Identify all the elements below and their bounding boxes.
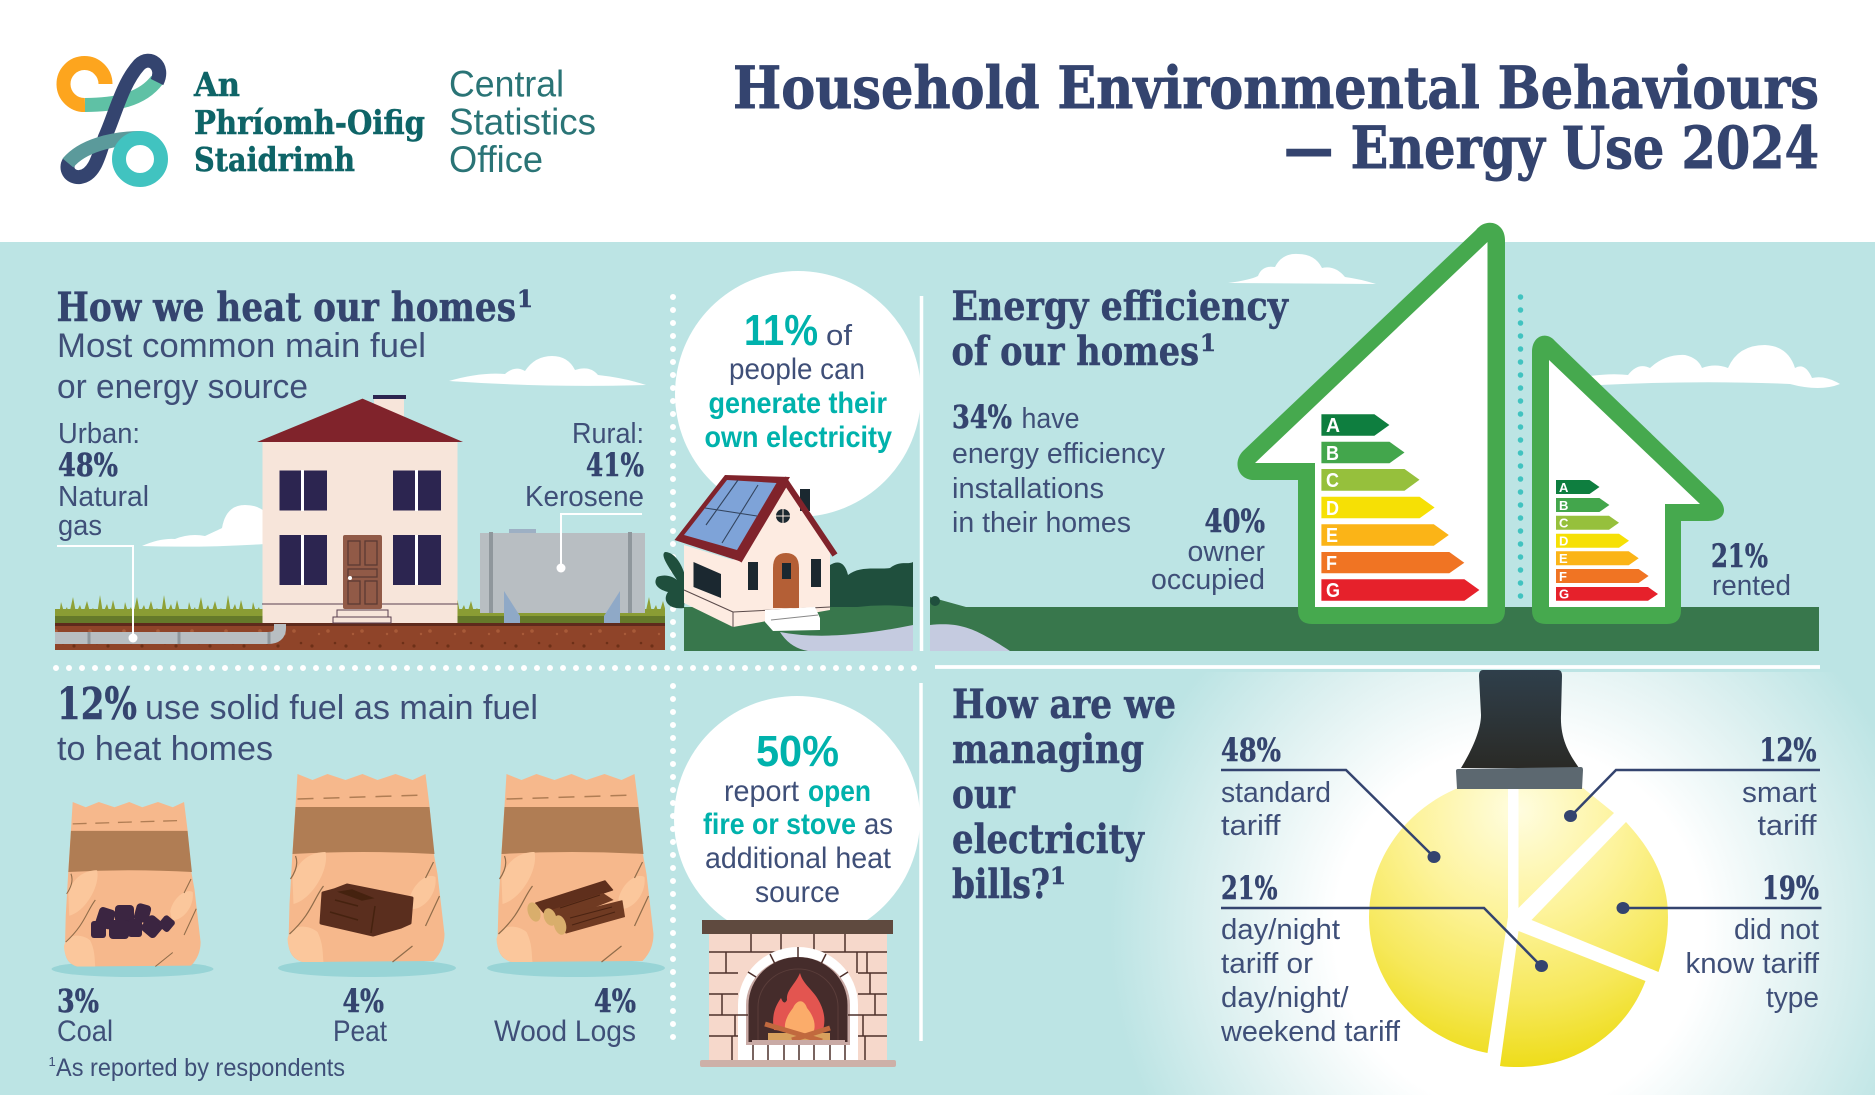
kerosene tank bbox=[480, 529, 645, 623]
energy rating scale large: C bbox=[1326, 470, 1339, 492]
logo text: English name: Central bbox=[449, 64, 564, 104]
slice: did not know 19% bbox=[1532, 822, 1668, 972]
text: 40% owner occupied: 40% bbox=[1204, 502, 1265, 540]
icon: coal bag bbox=[52, 802, 214, 977]
small house outline bbox=[1532, 336, 1724, 624]
label: 21% day/night tariff: day/night/ bbox=[1221, 982, 1349, 1014]
callout: 50% open fire: as bbox=[864, 808, 893, 841]
logo text: English name bbox=[449, 64, 596, 180]
callout: 11% generate electricity bbox=[704, 306, 892, 454]
energy rating scale large: A bbox=[1326, 415, 1340, 437]
energy rating scale small: F bbox=[1559, 569, 1567, 584]
heading: how are we managing our electricity bills bbox=[952, 681, 1176, 908]
label: coal: Coal bbox=[57, 1015, 113, 1048]
white line restore bbox=[935, 665, 1820, 669]
callout: 50% open fire: fire or stove bbox=[703, 808, 856, 841]
logo text: English name: Statistics bbox=[449, 102, 596, 142]
cloud behind house bbox=[142, 505, 265, 547]
energy rating scale small: G bbox=[1559, 586, 1569, 602]
slice: smart tariff 12% bbox=[1518, 788, 1614, 908]
rural text: Rural: bbox=[572, 418, 644, 450]
leader: 48% bbox=[1221, 770, 1440, 863]
label: 19% did not know: type bbox=[1766, 982, 1819, 1014]
label: 12% smart tariff: tariff bbox=[1758, 810, 1817, 842]
urban text bbox=[58, 418, 149, 542]
heading: how are we managing our electricity bills: How are we bbox=[952, 681, 1176, 728]
icon: CSO knot symbol bbox=[64, 61, 161, 180]
rural text: Kerosene bbox=[525, 481, 644, 513]
title bbox=[733, 54, 1819, 182]
text: 40% owner occupied: owner bbox=[1188, 536, 1265, 568]
heading: energy efficiency: Energy efficiency bbox=[952, 283, 1290, 330]
energy rating scale small: C bbox=[1559, 516, 1569, 530]
label: 48% standard tariff: 48% bbox=[1221, 731, 1281, 769]
footnote: 1 bbox=[48, 1054, 56, 1069]
page background band bbox=[0, 242, 1875, 1095]
label: wood logs: 4% bbox=[594, 982, 636, 1020]
label: 19% did not know bbox=[1686, 869, 1820, 1014]
house illustration bbox=[257, 395, 463, 623]
label: wood logs: Wood Logs bbox=[494, 1015, 636, 1048]
text: 34% installations: in their homes bbox=[952, 507, 1131, 539]
heading: 12% solid fuel: use solid fuel as main fuel bbox=[145, 689, 538, 727]
slice: standard tariff 48% bbox=[1369, 788, 1508, 1053]
icon: peat bag bbox=[278, 774, 456, 977]
background glow bbox=[1000, 672, 1875, 1095]
logo text: Irish name: Staidrimh bbox=[194, 140, 355, 179]
label: 19% did not know: 19% bbox=[1762, 869, 1819, 907]
callout: 50% open fire: 50% bbox=[756, 727, 839, 776]
panel: solid fuel bbox=[48, 679, 665, 1082]
label: wood logs bbox=[494, 982, 636, 1048]
panel: how we heat our homes bbox=[55, 284, 665, 650]
text: 40% owner occupied bbox=[1151, 502, 1265, 596]
leader: 19% bbox=[1616, 902, 1822, 914]
header: CSO logo bbox=[64, 61, 596, 180]
label: 12% smart tariff: smart bbox=[1742, 777, 1816, 809]
lamp cap bbox=[1456, 670, 1583, 789]
white circle bbox=[674, 696, 920, 942]
energy rating scale large: G bbox=[1326, 580, 1340, 602]
text: 34% installations: 34% bbox=[952, 398, 1012, 436]
text: 21% rented: 21% bbox=[1711, 537, 1768, 575]
callout: 11% generate electricity: 11% bbox=[744, 306, 818, 355]
label: 48% standard tariff bbox=[1221, 731, 1331, 842]
heading: how we heat our homes: 1 bbox=[517, 286, 533, 313]
heading: energy efficiency bbox=[952, 283, 1290, 375]
label: 21% day/night tariff bbox=[1220, 869, 1401, 1048]
soil bbox=[55, 623, 665, 650]
callout: 11% generate electricity: people can bbox=[729, 353, 865, 386]
label: 12% smart tariff bbox=[1742, 731, 1817, 842]
leader: kerosene bbox=[556, 514, 642, 572]
white circle bbox=[675, 271, 921, 517]
subheading: most common fuel: or energy source bbox=[57, 368, 308, 406]
leader: 21% bbox=[1221, 908, 1548, 972]
label: coal: 3% bbox=[57, 982, 99, 1020]
panel: energy efficiency of our homes bbox=[930, 223, 1840, 651]
panel: managing electricity bills bbox=[935, 667, 1875, 1095]
solar house illustration bbox=[655, 475, 913, 651]
light bulb pie chart bbox=[1369, 788, 1668, 1067]
callout: 50% open fire: source bbox=[755, 876, 840, 909]
subheading: most common fuel: Most common main fuel bbox=[57, 327, 426, 365]
text: 21% rented: rented bbox=[1712, 570, 1791, 602]
energy rating scale small: B bbox=[1559, 498, 1568, 513]
urban text: Natural bbox=[58, 481, 149, 513]
label: 48% standard tariff: standard bbox=[1221, 777, 1331, 809]
text: 34% installations: installations bbox=[952, 473, 1104, 505]
label: peat: Peat bbox=[333, 1015, 388, 1048]
cloud bbox=[1228, 254, 1376, 284]
heading: energy efficiency: of our homes bbox=[952, 328, 1199, 375]
rural text bbox=[525, 418, 644, 513]
logo text: English name: Office bbox=[449, 139, 543, 180]
gas pipe bbox=[55, 624, 280, 644]
slice: day/night 21% bbox=[1500, 931, 1646, 1067]
energy rating scale large bbox=[1321, 414, 1479, 602]
fireplace illustration bbox=[700, 920, 896, 1067]
icon: wood logs bag bbox=[487, 774, 665, 977]
big house outline bbox=[1237, 223, 1505, 624]
label: 19% did not know: know tariff bbox=[1686, 948, 1820, 980]
logo text: Irish name bbox=[193, 65, 425, 179]
grass bbox=[55, 593, 665, 623]
logo text: Irish name: An bbox=[193, 65, 240, 104]
heading: how are we managing our electricity bills: our bbox=[952, 771, 1016, 818]
cloud right bbox=[1590, 345, 1840, 388]
text: 34% installations: energy efficiency bbox=[952, 438, 1165, 470]
energy rating scale small: D bbox=[1559, 534, 1568, 548]
callout: 11% generate electricity: generate their bbox=[708, 387, 887, 420]
urban text: gas bbox=[58, 510, 102, 542]
label: 19% did not know: did not bbox=[1734, 914, 1819, 946]
heading: 12% solid fuel: 12% bbox=[57, 679, 137, 730]
heading: energy efficiency: 1 bbox=[1200, 330, 1216, 357]
energy rating scale large: D bbox=[1326, 498, 1339, 520]
callout: 11% generate electricity: of bbox=[826, 320, 853, 352]
heading: how are we managing our electricity bills: 1 bbox=[1050, 863, 1066, 890]
callout: 50% open fire: report bbox=[724, 775, 800, 808]
panel: open fire or stove bbox=[674, 696, 920, 1067]
label: 12% smart tariff: 12% bbox=[1760, 731, 1816, 769]
dividers bbox=[56, 296, 1820, 1041]
heading: how are we managing our electricity bills: managing bbox=[952, 726, 1144, 773]
heading: 12% solid fuel bbox=[57, 679, 538, 768]
energy rating scale large: B bbox=[1326, 443, 1339, 465]
ground strip bbox=[930, 596, 1819, 651]
label: peat bbox=[333, 982, 388, 1048]
energy rating scale large: E bbox=[1326, 525, 1338, 547]
text: 34% installations: have bbox=[1022, 403, 1080, 435]
text: 40% owner occupied: occupied bbox=[1151, 564, 1265, 596]
rural text: 41% bbox=[586, 446, 644, 484]
energy rating scale small: E bbox=[1559, 551, 1568, 566]
energy rating scale small: A bbox=[1559, 480, 1569, 495]
energy rating scale small bbox=[1556, 480, 1658, 602]
label: peat: 4% bbox=[342, 982, 384, 1020]
text: 34% installations bbox=[952, 398, 1165, 539]
leader: 12% bbox=[1564, 770, 1820, 822]
label: coal bbox=[57, 982, 113, 1048]
label: 21% day/night tariff: tariff or bbox=[1221, 948, 1313, 980]
heading: how we heat our homes: How we heat our homes bbox=[56, 284, 516, 331]
panel: generate electricity bbox=[655, 271, 921, 651]
urban text: Urban: bbox=[58, 418, 140, 450]
label: 21% day/night tariff: 21% bbox=[1221, 869, 1278, 907]
label: 21% day/night tariff: day/night bbox=[1221, 914, 1340, 946]
cloud bbox=[449, 356, 646, 386]
urban text: 48% bbox=[58, 446, 118, 484]
text: 21% rented bbox=[1711, 537, 1791, 602]
callout: 50% open fire: additional heat bbox=[705, 842, 892, 875]
footnote: As reported by respondents bbox=[56, 1054, 345, 1082]
heading: how are we managing our electricity bills: electricity bbox=[952, 816, 1145, 863]
logo text: Irish name: Phríomh-Oifig bbox=[194, 103, 425, 142]
leader: natural gas bbox=[57, 546, 138, 642]
label: 48% standard tariff: tariff bbox=[1221, 810, 1281, 842]
heading: how are we managing our electricity bills: bills? bbox=[952, 861, 1050, 908]
callout: 50% open fire: open bbox=[808, 775, 871, 808]
label: 21% day/night tariff: weekend tariff bbox=[1220, 1016, 1401, 1048]
heading: 12% solid fuel: to heat homes bbox=[57, 730, 273, 768]
callout: 11% generate electricity: own electricity bbox=[704, 421, 892, 454]
callout: 50% open fire bbox=[703, 727, 893, 909]
subheading: most common fuel bbox=[57, 327, 426, 406]
energy rating scale large: F bbox=[1326, 553, 1337, 575]
